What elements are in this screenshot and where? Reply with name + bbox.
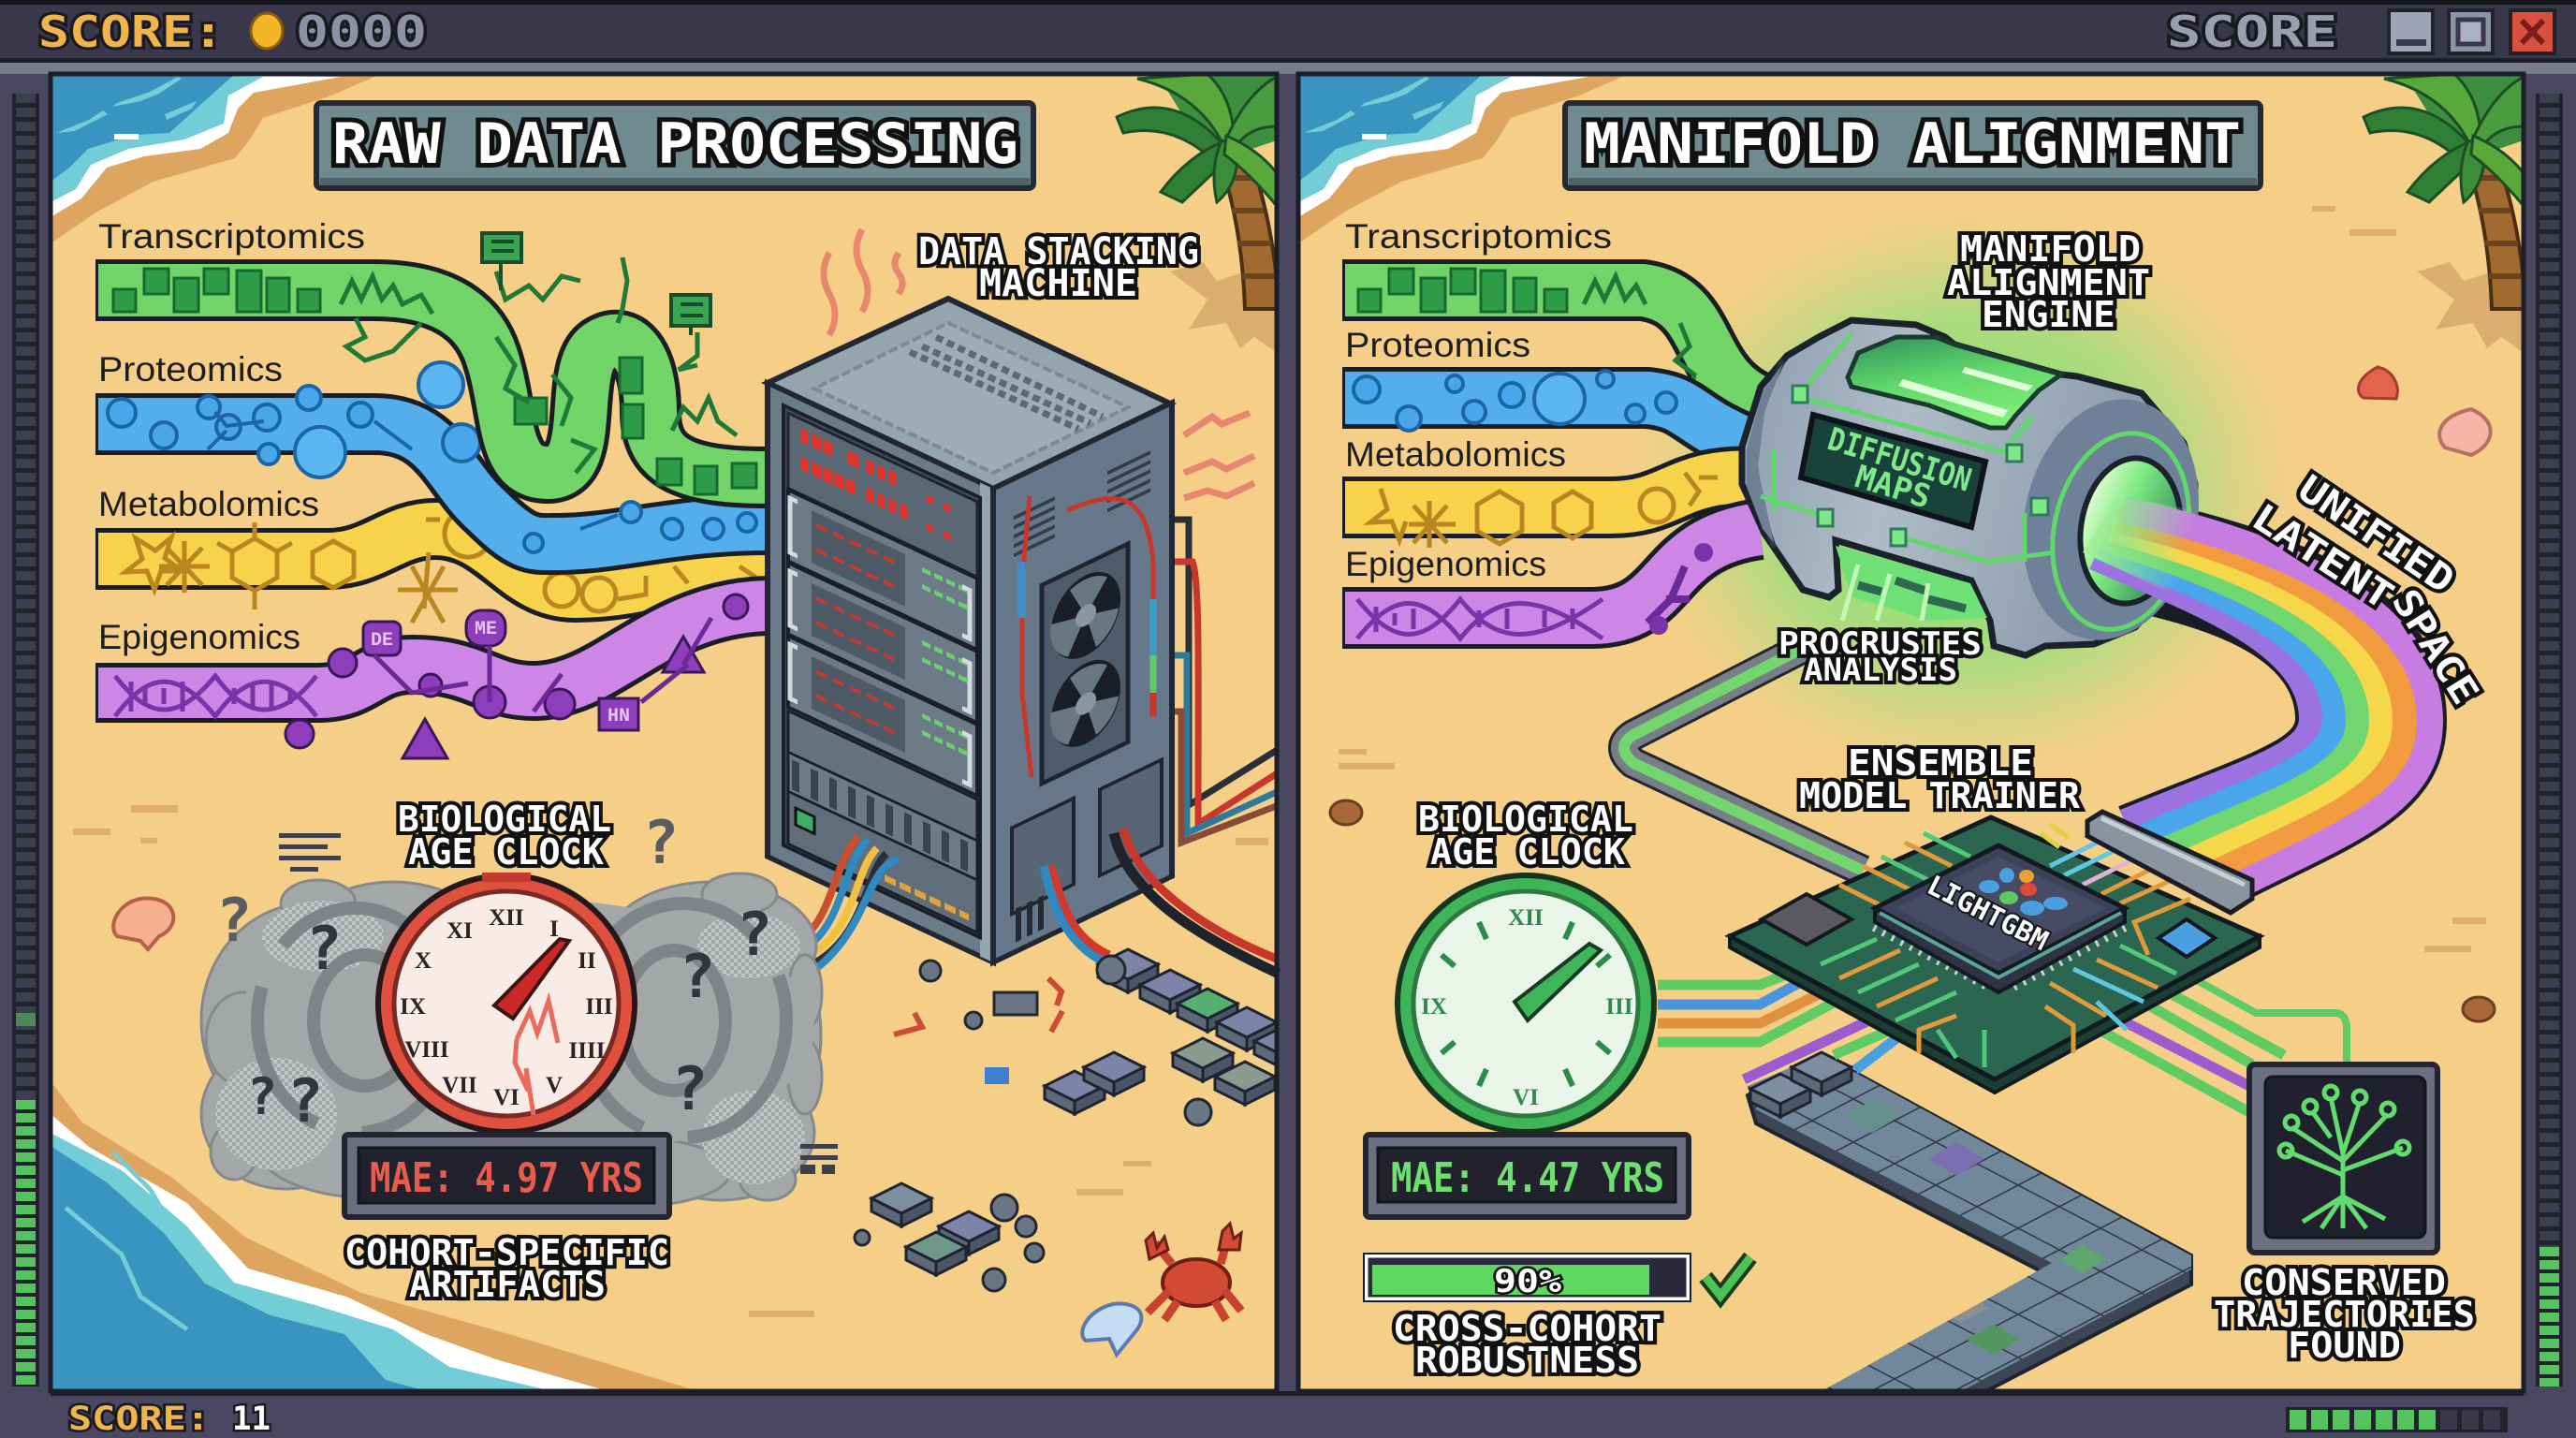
ribbon: epigenomics purple: ME	[475, 619, 497, 640]
label: unified latent space: UNIFIED	[2291, 467, 2462, 602]
icon: check mark	[1705, 1257, 1750, 1296]
question marks: ?	[643, 809, 679, 878]
traces: clock to chip	[1658, 964, 2347, 1112]
lower connector panels	[1012, 756, 1162, 917]
label: procrustes analysis: PROCRUSTES	[1778, 625, 1982, 663]
right face	[993, 403, 1172, 962]
floating data boxes	[482, 233, 710, 326]
sand marks	[73, 805, 1268, 1317]
omics labels left: Epigenomics	[98, 618, 300, 656]
numerals: III	[585, 994, 613, 1020]
numerals: IIII	[569, 1038, 605, 1064]
label: biological age clock left: BIOLOGICAL	[398, 799, 611, 840]
score digits: 0000	[296, 7, 427, 57]
clock: aligned biological age clock	[1398, 875, 1654, 1132]
question marks: ?	[216, 887, 252, 956]
left side meter	[12, 94, 39, 1387]
bottom score value: 11	[232, 1401, 271, 1438]
readout: mae 4.97: MAE: 4.97 YRS	[370, 1154, 643, 1202]
circuit traces	[1761, 334, 2055, 562]
led unit	[788, 413, 977, 577]
ribbon: proteomics right	[1342, 371, 1760, 449]
main chip	[1875, 908, 2125, 992]
label: cross-cohort robustness: CROSS-COHORT	[1393, 1308, 1661, 1349]
button: close	[2510, 10, 2554, 53]
question marks: ?	[672, 1055, 708, 1124]
top left ocean	[51, 74, 381, 243]
icon: pink shell right	[2439, 409, 2491, 455]
label: conserved trajectories found: CONSERVED	[2242, 1262, 2446, 1303]
right side meter	[2536, 94, 2563, 1387]
left cap shading	[1753, 360, 1783, 548]
numerals: X	[415, 948, 432, 974]
label: procrustes analysis: ANALYSIS	[1804, 652, 1957, 689]
palm tree right panel	[2364, 74, 2524, 353]
icon: coin	[251, 13, 283, 49]
window highlights	[1898, 367, 2033, 418]
bottom left ocean	[51, 1081, 698, 1391]
bottom score: SCORE:	[68, 1401, 210, 1438]
label: biological age clock right: AGE CLOCK	[1430, 831, 1625, 873]
label: procrustes analysis	[1778, 625, 1982, 689]
icon: fan lower	[1050, 647, 1120, 761]
label: conserved trajectories found: TRAJECTORIES	[2214, 1294, 2475, 1335]
readout: mae 4.97	[344, 1135, 669, 1217]
start blocks	[1750, 1052, 1852, 1117]
icon: data glyphs	[279, 833, 838, 1174]
ribbon: transcriptomics right	[1342, 269, 1760, 407]
ribbon: epigenomics purple: HN	[607, 706, 630, 727]
icon: fan upper	[1050, 559, 1120, 673]
beam fade at engine exit	[2083, 496, 2195, 604]
server cables	[798, 829, 1279, 974]
conduit: procrustes link	[1624, 646, 1863, 871]
title: manifold alignment: MANIFOLD ALIGNMENT	[1584, 111, 2241, 177]
numerals: VIII	[404, 1037, 449, 1063]
screen: diffusion maps: MAPS	[1851, 458, 1935, 517]
icon: blue shell	[1082, 1303, 1141, 1355]
omics labels left	[98, 217, 365, 656]
icon: crab	[1146, 1224, 1241, 1320]
label: manifold alignment engine	[1947, 228, 2150, 335]
readout: mae 4.47: MAE: 4.47 YRS	[1391, 1154, 1664, 1202]
ribbon: metabolomics yellow	[95, 510, 768, 623]
title: raw data processing: RAW DATA PROCESSING	[332, 111, 1018, 177]
chip pins	[1875, 925, 2125, 985]
scattered data blocks	[855, 949, 1314, 1291]
panel: raw data processing	[51, 74, 1277, 1391]
ribbon: metabolomics right	[1342, 473, 1760, 548]
rock	[1330, 800, 1362, 825]
omics labels right: Metabolomics	[1345, 435, 1566, 474]
label: cross-cohort robustness: ROBUSTNESS	[1415, 1340, 1639, 1381]
readout: mae 4.47	[1366, 1135, 1689, 1217]
rainbow beam outline	[2125, 524, 2430, 891]
icon: pink shell	[113, 899, 173, 949]
numerals: IX	[1421, 994, 1447, 1020]
numerals: V	[546, 1073, 563, 1098]
numerals	[400, 905, 613, 1110]
label: unified latent space: LATENT	[2244, 496, 2401, 619]
label: manifold alignment engine: ENGINE	[1982, 294, 2115, 335]
circuit nodes	[1793, 386, 2048, 546]
title: manifold alignment	[1565, 103, 2261, 188]
transcript bars	[113, 269, 756, 494]
screen: diffusion maps	[1801, 415, 1985, 527]
ribbon: epigenomics right	[1342, 529, 1760, 638]
ribbon: epigenomics purple	[95, 594, 768, 758]
ribbon: epigenomics purple: DE	[371, 630, 393, 652]
label: manifold alignment engine: MANIFOLD	[1960, 228, 2141, 270]
icon: red shell	[2358, 367, 2397, 399]
numerals: VI	[493, 1085, 520, 1110]
label: ensemble model trainer: ENSEMBLE	[1848, 742, 2033, 784]
button: maximize	[2449, 10, 2493, 53]
panel: left ribbons	[95, 233, 768, 758]
progress bar: 90 percent: 90%	[1494, 1263, 1562, 1300]
lower glow	[1836, 546, 1987, 621]
top left ocean right panel	[1298, 74, 1629, 243]
panel: manifold alignment	[1298, 74, 2524, 1404]
question marks: ?	[680, 943, 715, 1012]
server units	[788, 490, 977, 796]
ring hole	[2071, 451, 2189, 610]
ribbons into engine	[1342, 269, 1760, 638]
title: raw data processing	[316, 103, 1033, 188]
label: biological age clock right	[1418, 799, 1633, 873]
label: cross-cohort robustness	[1393, 1308, 1661, 1381]
crack	[515, 1001, 558, 1115]
numerals: I	[549, 917, 559, 942]
ribbon: transcriptomics green	[95, 233, 768, 494]
omics labels right: Proteomics	[1345, 326, 1530, 364]
numerals: VII	[442, 1073, 477, 1098]
progress bar: 90 percent	[1364, 1254, 1690, 1301]
monitor: conserved trajectories	[2249, 1064, 2437, 1253]
numerals: IX	[400, 994, 426, 1020]
label: cohort-specific artifacts	[344, 1232, 669, 1305]
score label right: SCORE	[2167, 7, 2337, 57]
numerals: XI	[446, 918, 473, 944]
numerals: VI	[1513, 1085, 1539, 1110]
numerals: XII	[1508, 905, 1544, 931]
ribbon: proteomics blue	[95, 362, 768, 552]
score label: SCORE:	[38, 7, 224, 57]
left face	[768, 383, 993, 962]
epigenetic nodes	[285, 594, 748, 758]
engine: manifold alignment	[1742, 320, 2220, 656]
screen: diffusion maps: DIFFUSION	[1823, 420, 1976, 500]
label: biological age clock left	[398, 799, 611, 873]
label: data stacking machine: MACHINE	[979, 262, 1137, 305]
bottom bar	[0, 1391, 2576, 1438]
rock	[2463, 997, 2495, 1021]
numerals: XII	[489, 905, 524, 931]
lightgbm logo blocks	[1979, 868, 2068, 916]
server: data stacking machine	[768, 299, 1172, 962]
label: biological age clock right: BIOLOGICAL	[1418, 799, 1633, 840]
label: unified latent space: SPACE	[2383, 582, 2486, 712]
numerals	[1421, 905, 1633, 1110]
label: unified latent space	[2244, 467, 2486, 712]
engine glow	[1638, 211, 2293, 772]
clock hand	[1515, 944, 1601, 1020]
board traces	[1821, 824, 2190, 1067]
tile path	[1732, 1039, 2209, 1404]
smoke cloud	[201, 873, 822, 1206]
question marks: ?	[737, 901, 772, 970]
omics labels left: Metabolomics	[98, 485, 319, 523]
question marks: ?	[306, 915, 342, 984]
omics labels right: Transcriptomics	[1345, 217, 1612, 256]
icon: tree	[2279, 1086, 2409, 1228]
top bar	[0, 0, 2576, 74]
lightgbm logo text: LIGHTGBM	[1922, 869, 2054, 957]
heat waves	[824, 229, 1254, 498]
glowing window	[1848, 337, 2061, 428]
waveform lines	[341, 257, 737, 473]
button: minimize	[2389, 10, 2433, 53]
clock hand	[494, 939, 569, 1019]
top face	[768, 299, 1170, 489]
label: ensemble model trainer	[1799, 742, 2080, 816]
palm tree	[1117, 74, 1277, 353]
ribbon connector	[2087, 812, 2252, 913]
omics labels right: Epigenomics	[1345, 545, 1546, 583]
icon: dna	[115, 676, 316, 716]
lower units	[788, 711, 977, 841]
numerals: II	[578, 948, 596, 974]
label: data stacking machine	[918, 230, 1199, 305]
sand marks right	[1339, 206, 2486, 952]
question marks	[216, 809, 772, 1137]
omics labels left: Proteomics	[98, 350, 283, 389]
question marks: ?	[247, 1067, 277, 1126]
rainbow beam	[2095, 510, 2430, 891]
omics labels right	[1345, 217, 1612, 583]
numerals: III	[1605, 994, 1633, 1020]
end ring	[2001, 383, 2220, 656]
question marks: ?	[287, 1067, 323, 1137]
label: cohort-specific artifacts: ARTIFACTS	[409, 1264, 606, 1305]
label: data stacking machine: DATA STACKING	[918, 230, 1199, 273]
label: manifold alignment engine: ALIGNMENT	[1947, 262, 2150, 303]
label: conserved trajectories found	[2214, 1262, 2475, 1366]
label: ensemble model trainer: MODEL TRAINER	[1799, 775, 2080, 816]
clock: broken biological age clock	[378, 873, 635, 1132]
omics labels left: Transcriptomics	[98, 217, 365, 256]
label: conserved trajectories found: FOUND	[2288, 1325, 2401, 1366]
cables behind server	[1172, 520, 1279, 843]
small chip	[1762, 894, 1852, 945]
circuit board: ensemble model trainer	[1730, 812, 2260, 1093]
blue component	[2159, 919, 2215, 957]
progress meter	[2286, 1407, 2508, 1432]
label: biological age clock left: AGE CLOCK	[408, 831, 604, 873]
label: cohort-specific artifacts: COHORT-SPECIFIC	[344, 1232, 669, 1273]
